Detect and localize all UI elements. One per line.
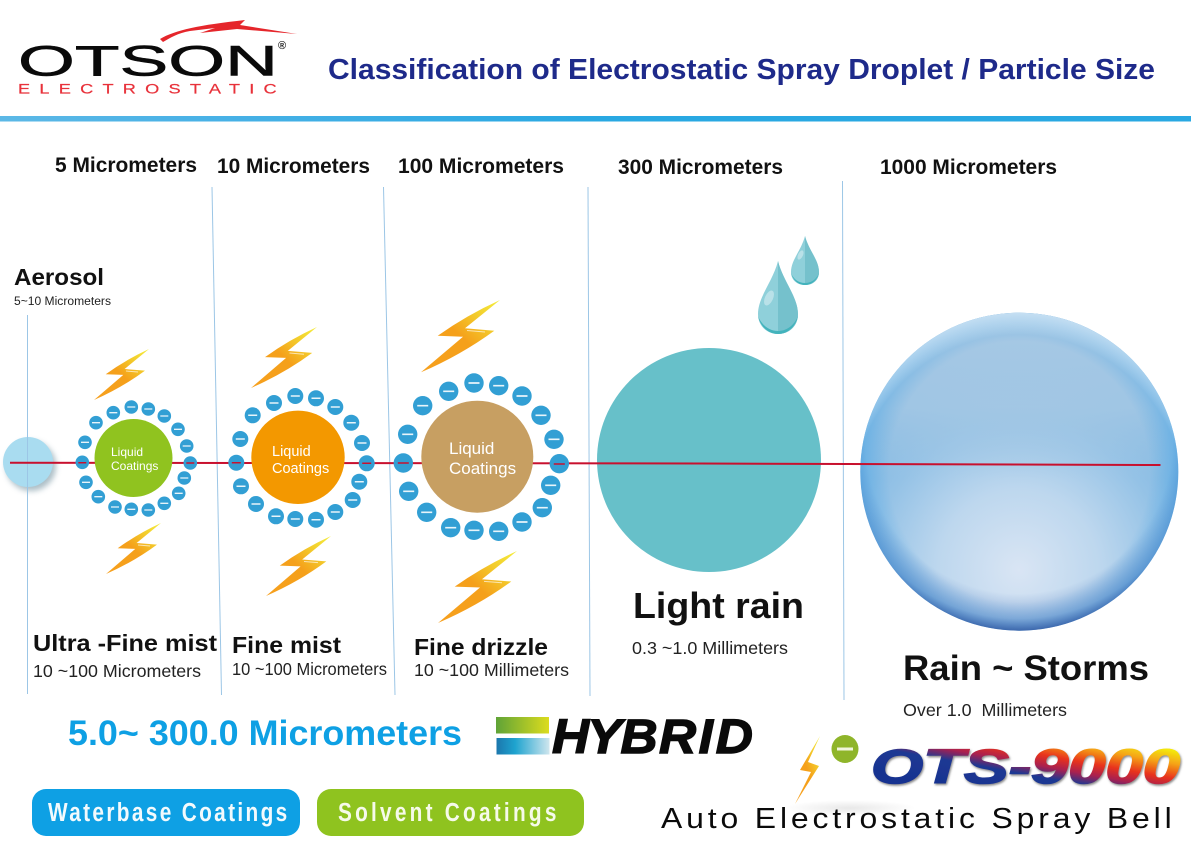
heading: 100 micrometers: 100 Micrometers	[398, 155, 564, 178]
range: Over 1.0 Millimeters	[903, 700, 1067, 720]
label: light rain	[632, 585, 804, 658]
lightning bolt bottom	[438, 551, 517, 623]
core droplet	[421, 401, 533, 513]
registered mark: ®	[278, 40, 286, 52]
lightning bolt bottom	[106, 523, 161, 574]
water drops icon	[758, 236, 819, 334]
minus badge	[832, 735, 858, 763]
core droplet	[251, 411, 345, 504]
header rule	[0, 116, 1191, 122]
rain storm sphere	[860, 313, 1178, 631]
heading: 5 micrometers: 5 Micrometers	[55, 154, 197, 177]
label: ultra-fine mist	[33, 630, 217, 681]
small drop	[791, 236, 819, 285]
negative charges	[76, 400, 197, 517]
core label: Coatings	[449, 459, 516, 478]
product name: OTS-9000	[871, 741, 1180, 794]
label: fine drizzle	[414, 634, 569, 680]
logo subtitle: ELECTROSTATIC	[18, 81, 277, 97]
shadow under name	[785, 800, 915, 816]
aerosol range: 5~10 Micrometers	[14, 296, 111, 308]
name: Light rain	[633, 585, 804, 626]
scale axis line	[10, 463, 1160, 465]
hybrid icon	[496, 717, 550, 754]
core label: Coatings	[272, 461, 329, 477]
negative charges	[228, 388, 375, 528]
hybrid logo	[496, 710, 753, 764]
large drop	[758, 261, 798, 334]
range: 0.3 ~1.0 Millimeters	[632, 638, 788, 658]
size column headings	[55, 154, 1057, 179]
core label: Liquid	[449, 439, 494, 458]
label: rain storms	[903, 649, 1149, 720]
heading: 300 micrometers: 300 Micrometers	[618, 156, 783, 179]
core label: Coatings	[111, 459, 158, 473]
light rain droplet	[597, 348, 821, 572]
core label: Liquid	[111, 445, 143, 459]
lightning bolt top	[251, 327, 317, 388]
core droplet	[94, 419, 172, 497]
button: solvent coatings	[317, 789, 584, 836]
heading: 10 micrometers: 10 Micrometers	[217, 155, 370, 178]
button: waterbase coatings: Waterbase Coatings	[48, 798, 287, 827]
core label: Liquid	[272, 444, 311, 460]
button: waterbase coatings	[32, 789, 300, 836]
droplet cluster: fine drizzle	[394, 300, 569, 623]
title: Classification of Electrostatic Spray Droplet / Particle Size	[328, 54, 1155, 86]
range: 10 ~100 Millimeters	[414, 660, 569, 680]
aerosol heading: Aerosol	[14, 264, 104, 290]
product logo: OTS-9000	[661, 735, 1180, 835]
aerosol heading and note	[14, 264, 111, 308]
lightning bolt top	[421, 300, 500, 372]
spray range statement: 5.0~ 300.0 Micrometers	[68, 714, 462, 753]
name: Fine drizzle	[414, 634, 548, 660]
logo swoosh	[160, 20, 297, 42]
hybrid wordmark: HYBRID	[552, 710, 753, 764]
droplet cluster: fine mist	[228, 327, 375, 596]
name: Ultra -Fine mist	[33, 630, 217, 656]
range: 10 ~100 Micrometers	[232, 659, 387, 679]
logo: OTSON Electrostatic	[18, 20, 297, 97]
product descriptor: Auto Electrostatic Spray Bell	[661, 804, 1172, 835]
aerosol droplet	[3, 437, 56, 491]
droplet cluster: ultra-fine mist	[76, 349, 197, 574]
range: 10 ~100 Micrometers	[33, 661, 201, 681]
name: Fine mist	[232, 632, 341, 658]
negative charges	[394, 373, 569, 541]
label: fine mist	[232, 632, 387, 679]
heading: 1000 micrometers: 1000 Micrometers	[880, 156, 1057, 179]
logo wordmark: OTSON	[18, 38, 278, 86]
name: Rain ~ Storms	[903, 649, 1149, 688]
lightning bolt bottom	[266, 536, 331, 596]
bolt icon	[795, 736, 820, 804]
button: solvent coatings: Solvent Coatings	[338, 798, 556, 827]
lightning bolt top	[94, 349, 149, 400]
